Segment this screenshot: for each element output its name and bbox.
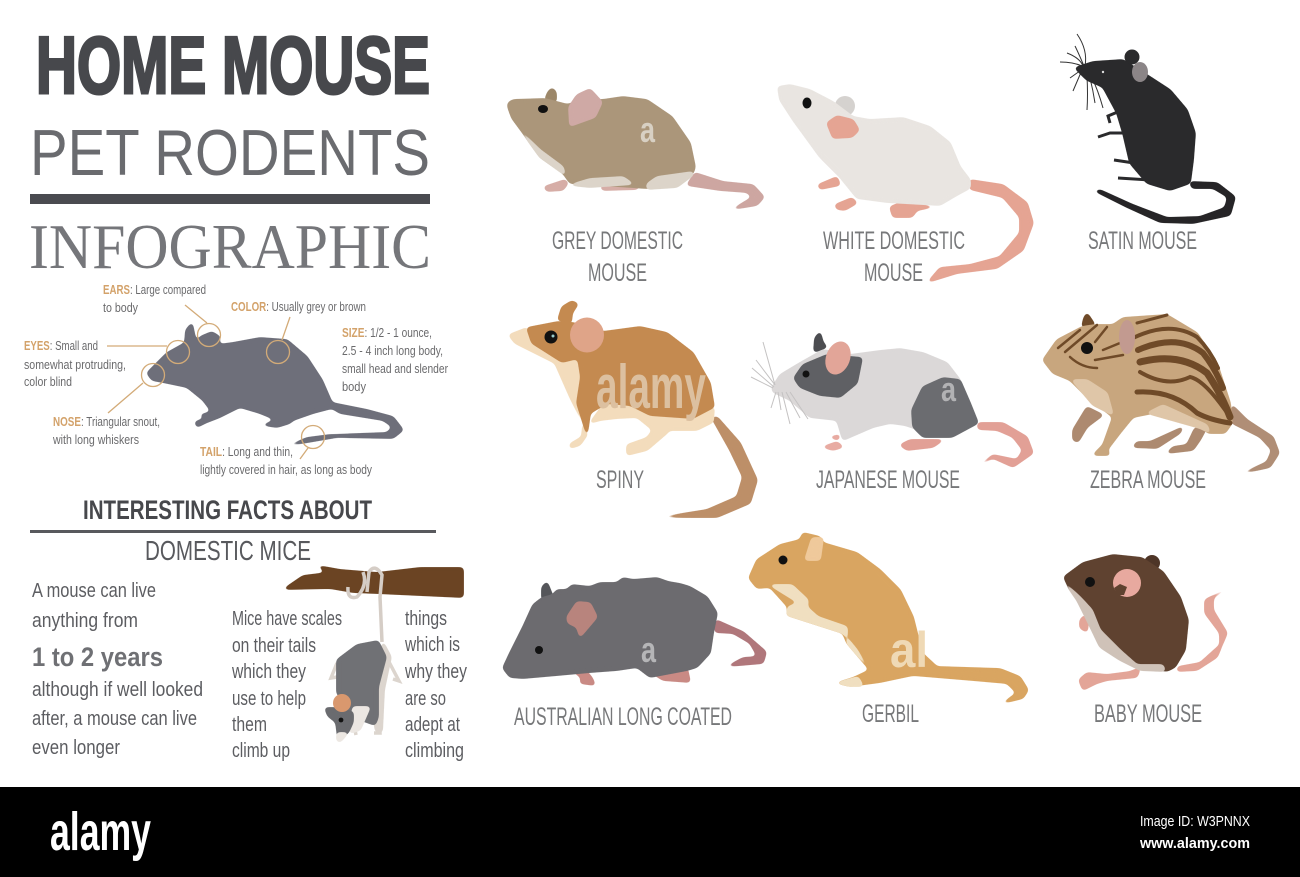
annotation: eyes: EYES: Small and: [24, 339, 98, 353]
fact: lifespan: 1 to 2 years: [32, 642, 163, 672]
label: australian long coated: AUSTRALIAN LONG COATED: [514, 703, 732, 731]
gerbil eye: [778, 556, 788, 564]
long coated tail: [715, 620, 766, 666]
label: grey domestic mouse: [552, 227, 683, 287]
long coated body: [503, 578, 717, 678]
annotation: eyes: somewhat protruding,: [24, 358, 126, 372]
annotation: nose: with long whiskers: [52, 433, 139, 447]
baby eye: [1085, 577, 1095, 587]
watermark mark: a: [941, 371, 957, 409]
gerbil ear: [805, 538, 823, 560]
footer url: www.alamy.com: [1139, 835, 1250, 852]
white domestic feet: [818, 177, 840, 189]
japanese dark ear: [814, 332, 827, 352]
fact: climbing: why they: [404, 661, 467, 683]
long coated dark ear: [542, 582, 553, 600]
label: spiny: SPINY: [596, 466, 644, 494]
title: home mouse: HOME MOUSE: [36, 21, 430, 111]
japanese tail: [978, 423, 1033, 467]
mouse: japanese: [751, 332, 1033, 467]
satin ear: [1132, 62, 1148, 82]
annotation: eyes: [24, 339, 126, 389]
white domestic tail: [928, 180, 1033, 282]
footer logo: alamy: [50, 802, 151, 862]
label: gerbil: GERBIL: [862, 700, 919, 728]
footer bar: [0, 787, 1300, 877]
facts subheading: DOMESTIC MICE: [145, 535, 311, 566]
fact: lifespan: even longer: [32, 737, 120, 759]
grey domestic belly: [520, 130, 565, 175]
baby foot and arm: [1079, 668, 1140, 690]
annotation: tail: TAIL: Long and thin,: [200, 445, 293, 459]
zebra far legs: [1073, 407, 1103, 442]
japanese whiskers: [751, 342, 808, 424]
fact: tail scales: on their tails: [232, 635, 316, 657]
white domestic pink ear: [827, 116, 859, 138]
spiny cream lower body: [590, 405, 714, 455]
annotation: size: 2.5 - 4 inch long body,: [342, 344, 443, 358]
fact: tail scales: use to help: [232, 688, 306, 710]
japanese feet: [823, 442, 843, 450]
long coated ear: [567, 602, 597, 637]
annotation: tail: [200, 445, 373, 477]
fact: lifespan: although if well looked: [32, 679, 203, 701]
annotation: size: small head and slender: [342, 362, 448, 376]
gerbil body and tail: [749, 533, 1028, 703]
annotation: tail: lightly covered in hair, as long as body: [200, 463, 373, 477]
spiny ear: [570, 318, 604, 352]
grey domestic feet: [544, 180, 568, 191]
watermark mark: a: [640, 109, 656, 150]
fact: lifespan: anything from: [32, 610, 138, 632]
fact: tail scales: climb up: [232, 740, 290, 762]
fact: climbing: climbing: [405, 740, 464, 762]
fact: climbing: adept at: [405, 714, 460, 736]
label: grey domestic mouse: MOUSE: [588, 259, 647, 287]
fact: climbing: [404, 608, 467, 762]
annotation: ears: EARS: Large compared: [103, 283, 206, 297]
satin eye: [1102, 71, 1104, 73]
zebra belly: [1072, 380, 1113, 415]
japanese body: [772, 349, 978, 440]
label: zebra mouse: ZEBRA MOUSE: [1090, 466, 1206, 494]
japanese eye: [802, 370, 810, 378]
mouse: grey domestic: [508, 88, 764, 209]
japanese head patch: [794, 355, 862, 397]
annotation: eyes: color blind: [24, 375, 72, 389]
baby body: [1064, 555, 1188, 671]
mouse: satin: [1060, 34, 1235, 223]
annotation: color: COLOR: Usually grey or brown: [231, 300, 366, 314]
label: white domestic mouse: [823, 227, 965, 287]
white domestic eye: [802, 98, 812, 108]
fact: lifespan: [32, 580, 203, 759]
annotation: size: [342, 326, 448, 394]
fact: tail scales: which they: [231, 661, 306, 683]
satin whiskers: [1060, 34, 1103, 110]
panel: mouse anatomy: [24, 283, 448, 477]
long coated feet: [572, 670, 595, 685]
subtitle: pet rodents: PET RODENTS: [30, 116, 430, 189]
label: japanese mouse: JAPANESE MOUSE: [816, 466, 960, 494]
annotation: ears: [103, 283, 206, 315]
long coated eye: [535, 646, 543, 654]
annotation: nose: [52, 415, 160, 447]
annotation: ears: to body: [103, 301, 139, 315]
fact: tail scales: Mice have scales: [232, 608, 342, 630]
baby back ear: [1144, 555, 1160, 571]
facts divider: [30, 530, 436, 533]
japanese rump patch: [912, 378, 978, 437]
label: white domestic mouse: WHITE DOMESTIC: [823, 227, 965, 255]
anatomy callout circles and leader lines: [107, 305, 324, 459]
label: satin mouse: SATIN MOUSE: [1088, 227, 1197, 255]
satin body: [1075, 60, 1195, 190]
spiny cream muzzle and chest: [509, 328, 587, 448]
spiny body: [527, 322, 714, 435]
zebra body: [1043, 315, 1232, 455]
baby ear: [1113, 569, 1141, 597]
grey domestic small ear: [545, 88, 556, 102]
icon: mouse hanging from branch: [284, 566, 463, 742]
satin tail: [1095, 182, 1235, 223]
satin back ear: [1124, 50, 1140, 64]
fact: tail scales: [231, 608, 342, 762]
label: baby mouse: BABY MOUSE: [1094, 700, 1202, 728]
grey domestic tail: [687, 173, 764, 209]
heading divider bar: [30, 194, 430, 204]
mouse: spiny: [509, 301, 757, 517]
grey domestic eye: [538, 105, 548, 113]
label: grey domestic mouse: GREY DOMESTIC: [552, 227, 683, 255]
fact: lifespan: A mouse can live: [32, 580, 156, 602]
annotation: size: body: [342, 380, 367, 394]
annotation: nose: NOSE: Triangular snout,: [53, 415, 160, 429]
zebra stripes: [1058, 315, 1230, 423]
fact: tail scales: them: [232, 714, 267, 736]
facts heading: INTERESTING FACTS ABOUT: [83, 495, 372, 525]
fact: climbing: are so: [405, 688, 446, 710]
fact: climbing: things: [405, 608, 447, 630]
fact: climbing: which is: [404, 634, 460, 656]
gerbil cream belly: [770, 585, 868, 668]
white domestic back ear: [835, 96, 855, 116]
zebra tail: [1232, 405, 1279, 473]
watermark: alamy: [596, 353, 706, 422]
annotation: size: SIZE: 1/2 - 1 ounce,: [342, 326, 432, 340]
watermark mark: a: [641, 629, 657, 670]
watermark mark: al: [890, 622, 928, 678]
spiny eye: [544, 330, 558, 344]
satin limbs: [1098, 111, 1150, 180]
panel: interesting facts: [30, 495, 467, 762]
zebra dark ear: [1082, 313, 1095, 327]
mouse: baby: [1064, 555, 1230, 690]
mouse: gerbil: [749, 533, 1028, 703]
baby belly: [1064, 582, 1165, 671]
zebra eye: [1081, 342, 1093, 354]
japanese pink ear: [821, 338, 855, 378]
fact: lifespan: after, a mouse can live: [32, 708, 197, 730]
label: white domestic mouse: MOUSE: [864, 259, 923, 287]
grey domestic ear: [569, 89, 602, 126]
footer image id: Image ID: W3PNNX: [1140, 813, 1250, 830]
baby tail: [1177, 587, 1230, 671]
spiny brown ear: [558, 301, 578, 323]
spiny tail: [663, 417, 757, 517]
grey domestic body: [508, 97, 695, 188]
mouse: australian long coated: [503, 578, 766, 685]
mouse: zebra: [1043, 313, 1279, 473]
subtitle: infographic: INFOGRAPHIC: [29, 211, 431, 282]
anatomy mouse illustration: [147, 323, 403, 445]
white domestic body: [778, 85, 970, 205]
mouse: white domestic: [778, 85, 1033, 282]
zebra ear: [1119, 320, 1135, 354]
